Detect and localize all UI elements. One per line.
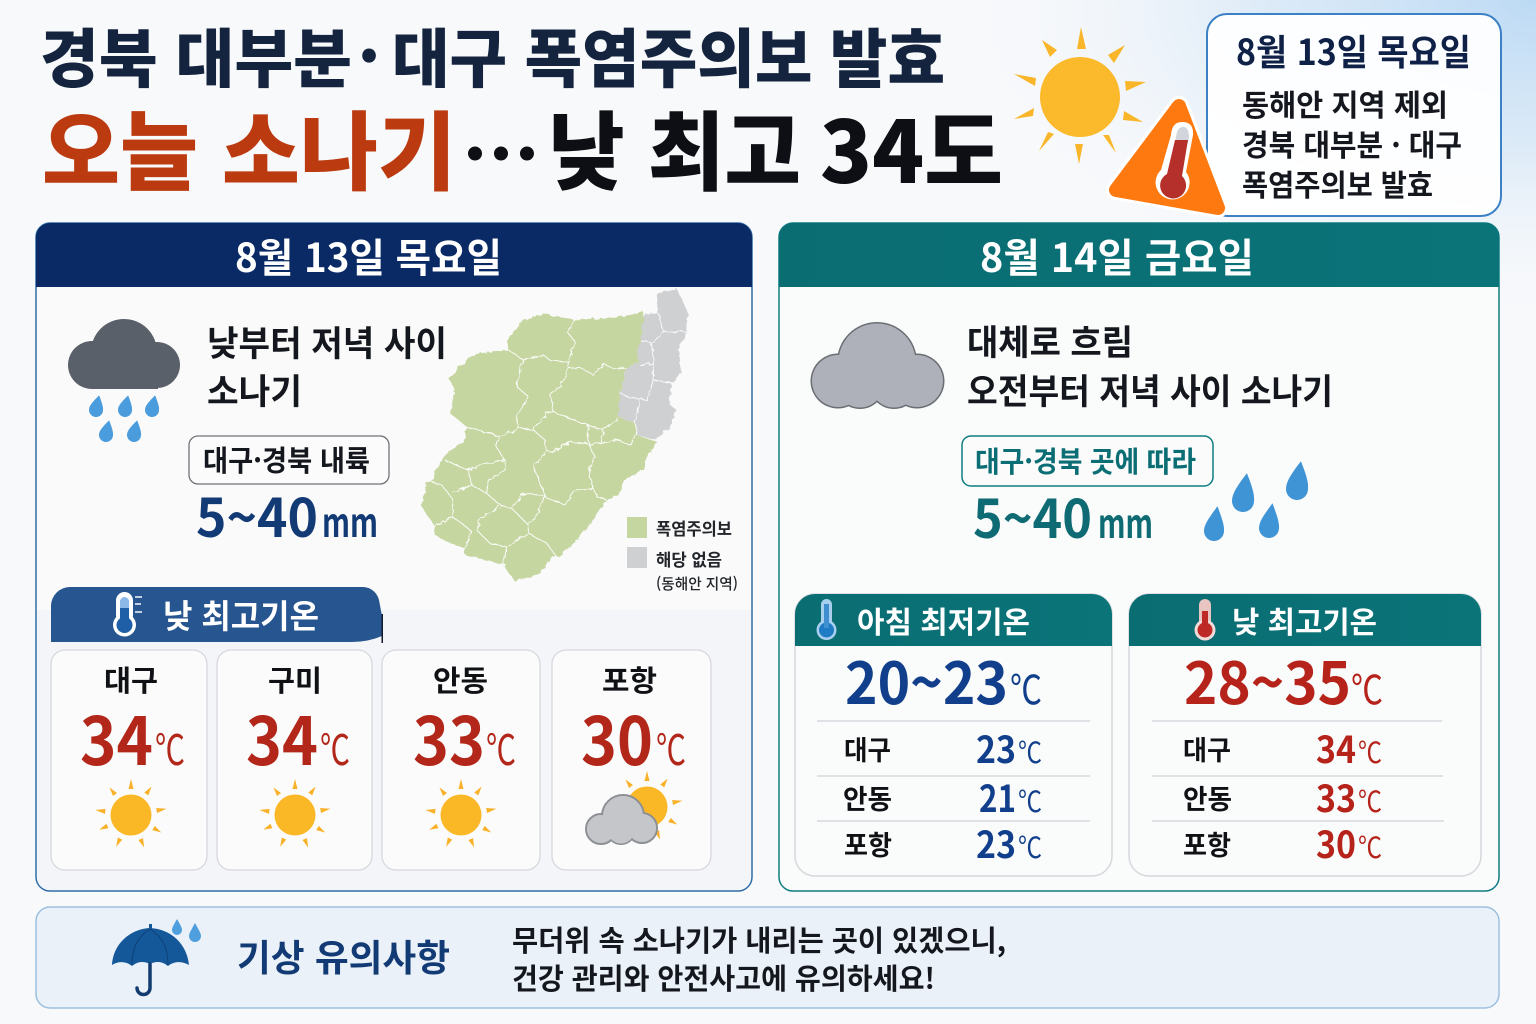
region pill 2: 대구·경북 곳에 따라	[975, 439, 1196, 481]
card header morning	[795, 594, 1112, 646]
card: 낮 최고기온: 28~35	[1184, 637, 1351, 721]
icon: blue thermometer	[113, 592, 142, 636]
card: 아침 최저기온: ℃	[1018, 730, 1042, 772]
title line 1 part 2: 대구 폭염주의보 발효	[392, 9, 945, 101]
card: 대구: 대구	[104, 658, 158, 700]
card: 대구: 34	[80, 689, 153, 785]
title line 2 ellipsis: …	[462, 94, 540, 206]
icon: rain drops	[1203, 460, 1312, 542]
caution heading: 기상 유의사항	[237, 928, 450, 982]
map: Gyeongbuk heat advisory	[422, 288, 688, 582]
card: 낮 최고기온: 33	[1316, 769, 1356, 823]
region pill: 대구·경북 내륙	[203, 438, 370, 480]
card: 낮 최고기온: ℃	[1358, 825, 1382, 867]
card: 낮 최고기온: 낮 최고기온	[1232, 598, 1377, 642]
icon: sun behind cloud	[586, 771, 683, 844]
card: 낮 최고기온	[1129, 594, 1481, 876]
card: 포항: 포항	[602, 658, 657, 700]
header text 1: 8월 13일 목요일	[235, 226, 502, 284]
info line 2: 경북 대부분 · 대구	[1242, 121, 1462, 165]
icon: gray cloud	[810, 322, 944, 409]
card: 낮 최고기온: ℃	[1358, 779, 1382, 821]
card: 포항	[552, 650, 711, 870]
header bar 2	[779, 223, 1499, 287]
icon: big sun	[1014, 27, 1146, 164]
rainfall amount 2	[973, 478, 1153, 554]
title line 2 number: 34도	[820, 83, 1003, 208]
card: 구미: 34	[246, 689, 318, 785]
card: 대구: ℃	[155, 717, 185, 778]
forecast text 3: 대체로 흐림	[967, 315, 1133, 366]
title line 2 red: 오늘 소나기	[42, 83, 456, 208]
panel lower band	[37, 610, 751, 890]
map legend: 폭염주의보	[656, 515, 732, 540]
card header daytime	[1129, 594, 1481, 646]
sky gradient	[936, 0, 1536, 330]
card: 구미: ℃	[320, 717, 350, 778]
card: 낮 최고기온: 포항	[1183, 824, 1231, 863]
rainfall amount: mm	[322, 491, 378, 549]
card: 아침 최저기온: 포항	[844, 824, 892, 863]
card: 구미: 구미	[268, 658, 322, 700]
card: 아침 최저기온: 23	[976, 720, 1016, 774]
card: 아침 최저기온: 21	[979, 769, 1016, 823]
card: 낮 최고기온: 34	[1316, 720, 1356, 774]
card: 아침 최저기온: ℃	[1018, 779, 1042, 821]
panel: 8월 13일	[36, 223, 752, 891]
forecast text 2: 소나기	[207, 364, 302, 415]
card: 포항: ℃	[656, 717, 686, 778]
icon: warning triangle with thermometer	[1116, 106, 1218, 208]
title	[40, 7, 1003, 208]
tab: 낮 최고기온: 낮 최고기온	[163, 590, 319, 638]
card: 포항: 30	[581, 689, 653, 785]
card: 구미	[217, 650, 372, 870]
rainfall amount 2: mm	[1098, 492, 1153, 550]
info line 1: 동해안 지역 제외	[1242, 81, 1448, 125]
tab: 낮 최고기온	[51, 587, 383, 643]
map legend: (동해안 지역)	[656, 573, 738, 594]
rainfall amount: 5~40	[196, 477, 318, 553]
rainfall amount 2: 5~40	[973, 478, 1092, 554]
info box: 8월 13일	[1207, 14, 1501, 216]
caution text: 무더위 속 소나기가 내리는 곳이 있겠으니,	[512, 918, 1006, 960]
card: 안동: 안동	[433, 658, 488, 700]
info line 3: 폭염주의보 발효	[1242, 161, 1433, 205]
info date: 8월 13일 목요일	[1236, 24, 1471, 76]
card: 낮 최고기온: 30	[1316, 815, 1356, 869]
panel: weather caution	[36, 907, 1499, 1008]
card: 낮 최고기온: ℃	[1358, 730, 1382, 772]
forecast text 4: 오전부터 저녁 사이 소나기	[967, 364, 1333, 415]
card: 대구	[51, 650, 207, 870]
card: 아침 최저기온: 아침 최저기온	[857, 598, 1030, 642]
forecast text 1: 낮부터 저녁 사이	[207, 316, 447, 367]
panel: 8월 14일	[779, 223, 1499, 891]
card: 아침 최저기온: 23	[976, 815, 1016, 869]
card: 아침 최저기온: 대구	[844, 729, 891, 768]
card: 아침 최저기온: ℃	[1010, 658, 1042, 716]
icon: blue thermometer small	[816, 599, 836, 640]
card: 낮 최고기온: 대구	[1183, 729, 1231, 768]
icon: red thermometer small	[1194, 599, 1216, 640]
header bar 1	[36, 223, 752, 287]
rainfall amount	[196, 477, 378, 553]
header text 2: 8월 14일 금요일	[980, 226, 1254, 284]
card: 낮 최고기온: ℃	[1351, 658, 1383, 716]
card: 아침 최저기온	[795, 594, 1112, 876]
icon: dark rain cloud	[68, 319, 180, 443]
card: 안동: 33	[413, 689, 485, 785]
card: 아침 최저기온: 안동	[843, 778, 892, 817]
title line 1 dot: ·	[358, 7, 380, 99]
icon: umbrella	[112, 919, 201, 994]
title line 1 part 1: 경북 대부분	[40, 9, 352, 101]
card: 아침 최저기온: ℃	[1018, 825, 1042, 867]
card: 안동: ℃	[486, 717, 516, 778]
card: 낮 최고기온: 안동	[1183, 778, 1232, 817]
map legend	[627, 515, 738, 594]
card: 안동	[382, 650, 540, 870]
caution text 2: 건강 관리와 안전사고에 유의하세요!	[512, 956, 935, 998]
card: 아침 최저기온: 20~23	[845, 637, 1008, 721]
map legend: 해당 없음	[656, 546, 722, 571]
title line 2 black: 낮 최고	[548, 83, 801, 208]
